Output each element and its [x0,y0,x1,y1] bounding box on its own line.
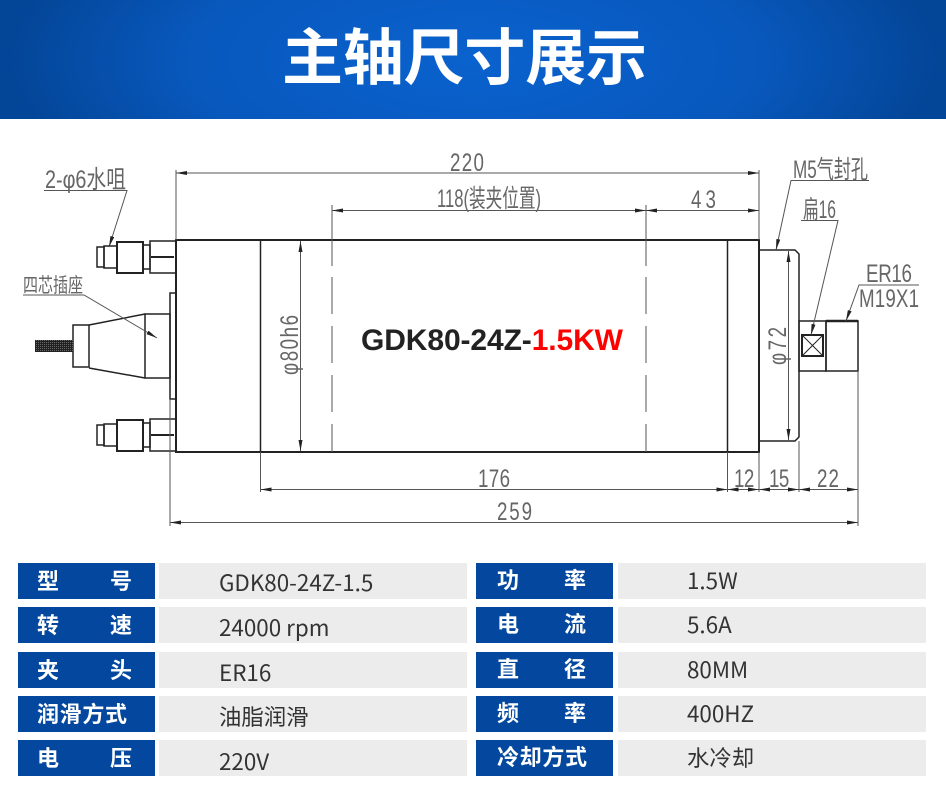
row: collet: ER16 [219,656,271,688]
row: collet [18,652,467,688]
dimension: 22: 22 [817,464,839,493]
callout: four-pin socket [23,274,157,338]
row: voltage: 220V [219,745,269,777]
four-pin connector [35,293,176,399]
dimension: 22 [799,464,858,493]
dimension drawing [23,148,919,526]
row: current: 电 [497,607,519,639]
row: speed: 转 [37,608,59,640]
row: lubrication: 润滑方式 [37,697,127,729]
callout: ER16 M19X1: ER16 [866,259,912,288]
title: 主轴尺寸展示 [282,8,647,97]
row: cooling [476,740,926,776]
row: cooling: 冷却方式 [497,740,587,772]
dimension: 43: 43 [691,185,716,214]
row: speed: 24000 rpm [219,611,329,643]
model label: GDK80-24Z-1.5KW [361,324,624,357]
row: frequency: 率 [564,696,586,728]
row: diameter: 径 [564,652,586,684]
dimension: diameter 80h6: φ80h6 [275,315,304,375]
row: power: 功 [497,563,519,595]
row: lubrication [18,696,467,732]
callout: flat 16 [801,196,838,335]
callout: flat 16: 扁16 [803,196,836,224]
dimension: 15: 15 [769,464,789,493]
callout: ER16 M19X1: M19X1 [859,284,919,313]
spec table [18,563,926,777]
row: speed [18,607,467,643]
dimension: diameter 72: φ72 [763,327,792,365]
spindle body [176,240,759,452]
row: current: 5.6A [687,608,732,640]
top water nozzle [97,241,176,273]
extension and centre lines [170,170,858,526]
row: collet: 头 [110,653,132,685]
header banner [0,0,946,119]
callout: four-pin socket: 四芯插座 [23,274,83,297]
row: frequency: 频 [497,696,519,728]
row: lubrication: 油脂润滑 [219,700,309,732]
callout: M5 air seal hole: M5气封孔 [793,156,868,184]
row: frequency [476,696,926,732]
row: power [476,563,926,599]
wrench flat symbol [802,335,823,356]
dimension: 220: 220 [450,148,484,177]
row: model [18,563,467,599]
row: current: 流 [564,607,586,639]
row: diameter [476,652,926,688]
row: model: 型 [37,564,59,596]
row: model: 号 [110,564,132,596]
dimension: 118 clamping position: 118(装夹位置) [437,185,541,213]
callout: water nozzle [44,166,127,247]
row: cooling: 水冷却 [687,741,754,773]
row: power: 1.5W [687,564,738,596]
row: voltage [18,740,467,777]
row: frequency: 400HZ [687,697,754,729]
row: voltage: 压 [110,741,132,773]
callout: ER16 M19X1 [846,259,919,321]
callout: water nozzle: 2-φ6水咀 [45,166,126,194]
rear flange and shaft [759,250,858,441]
row: diameter: 80MM [687,653,748,685]
row: collet: 夹 [37,653,59,685]
row: model: GDK80-24Z-1.5 [219,566,373,598]
dimension: 12 [728,464,759,493]
dimension: 259: 259 [497,497,532,526]
row: power: 率 [564,563,586,595]
row: current [476,607,926,643]
bottom water nozzle [97,419,176,451]
dimension: 15 [759,464,799,493]
row: speed: 速 [110,608,132,640]
dimension: 176: 176 [478,464,510,493]
callout: M5 air seal hole [776,156,869,250]
row: diameter: 直 [497,652,519,684]
dimension: 43 [646,185,759,214]
row: voltage: 电 [37,741,59,773]
dimension: 12: 12 [734,464,754,493]
